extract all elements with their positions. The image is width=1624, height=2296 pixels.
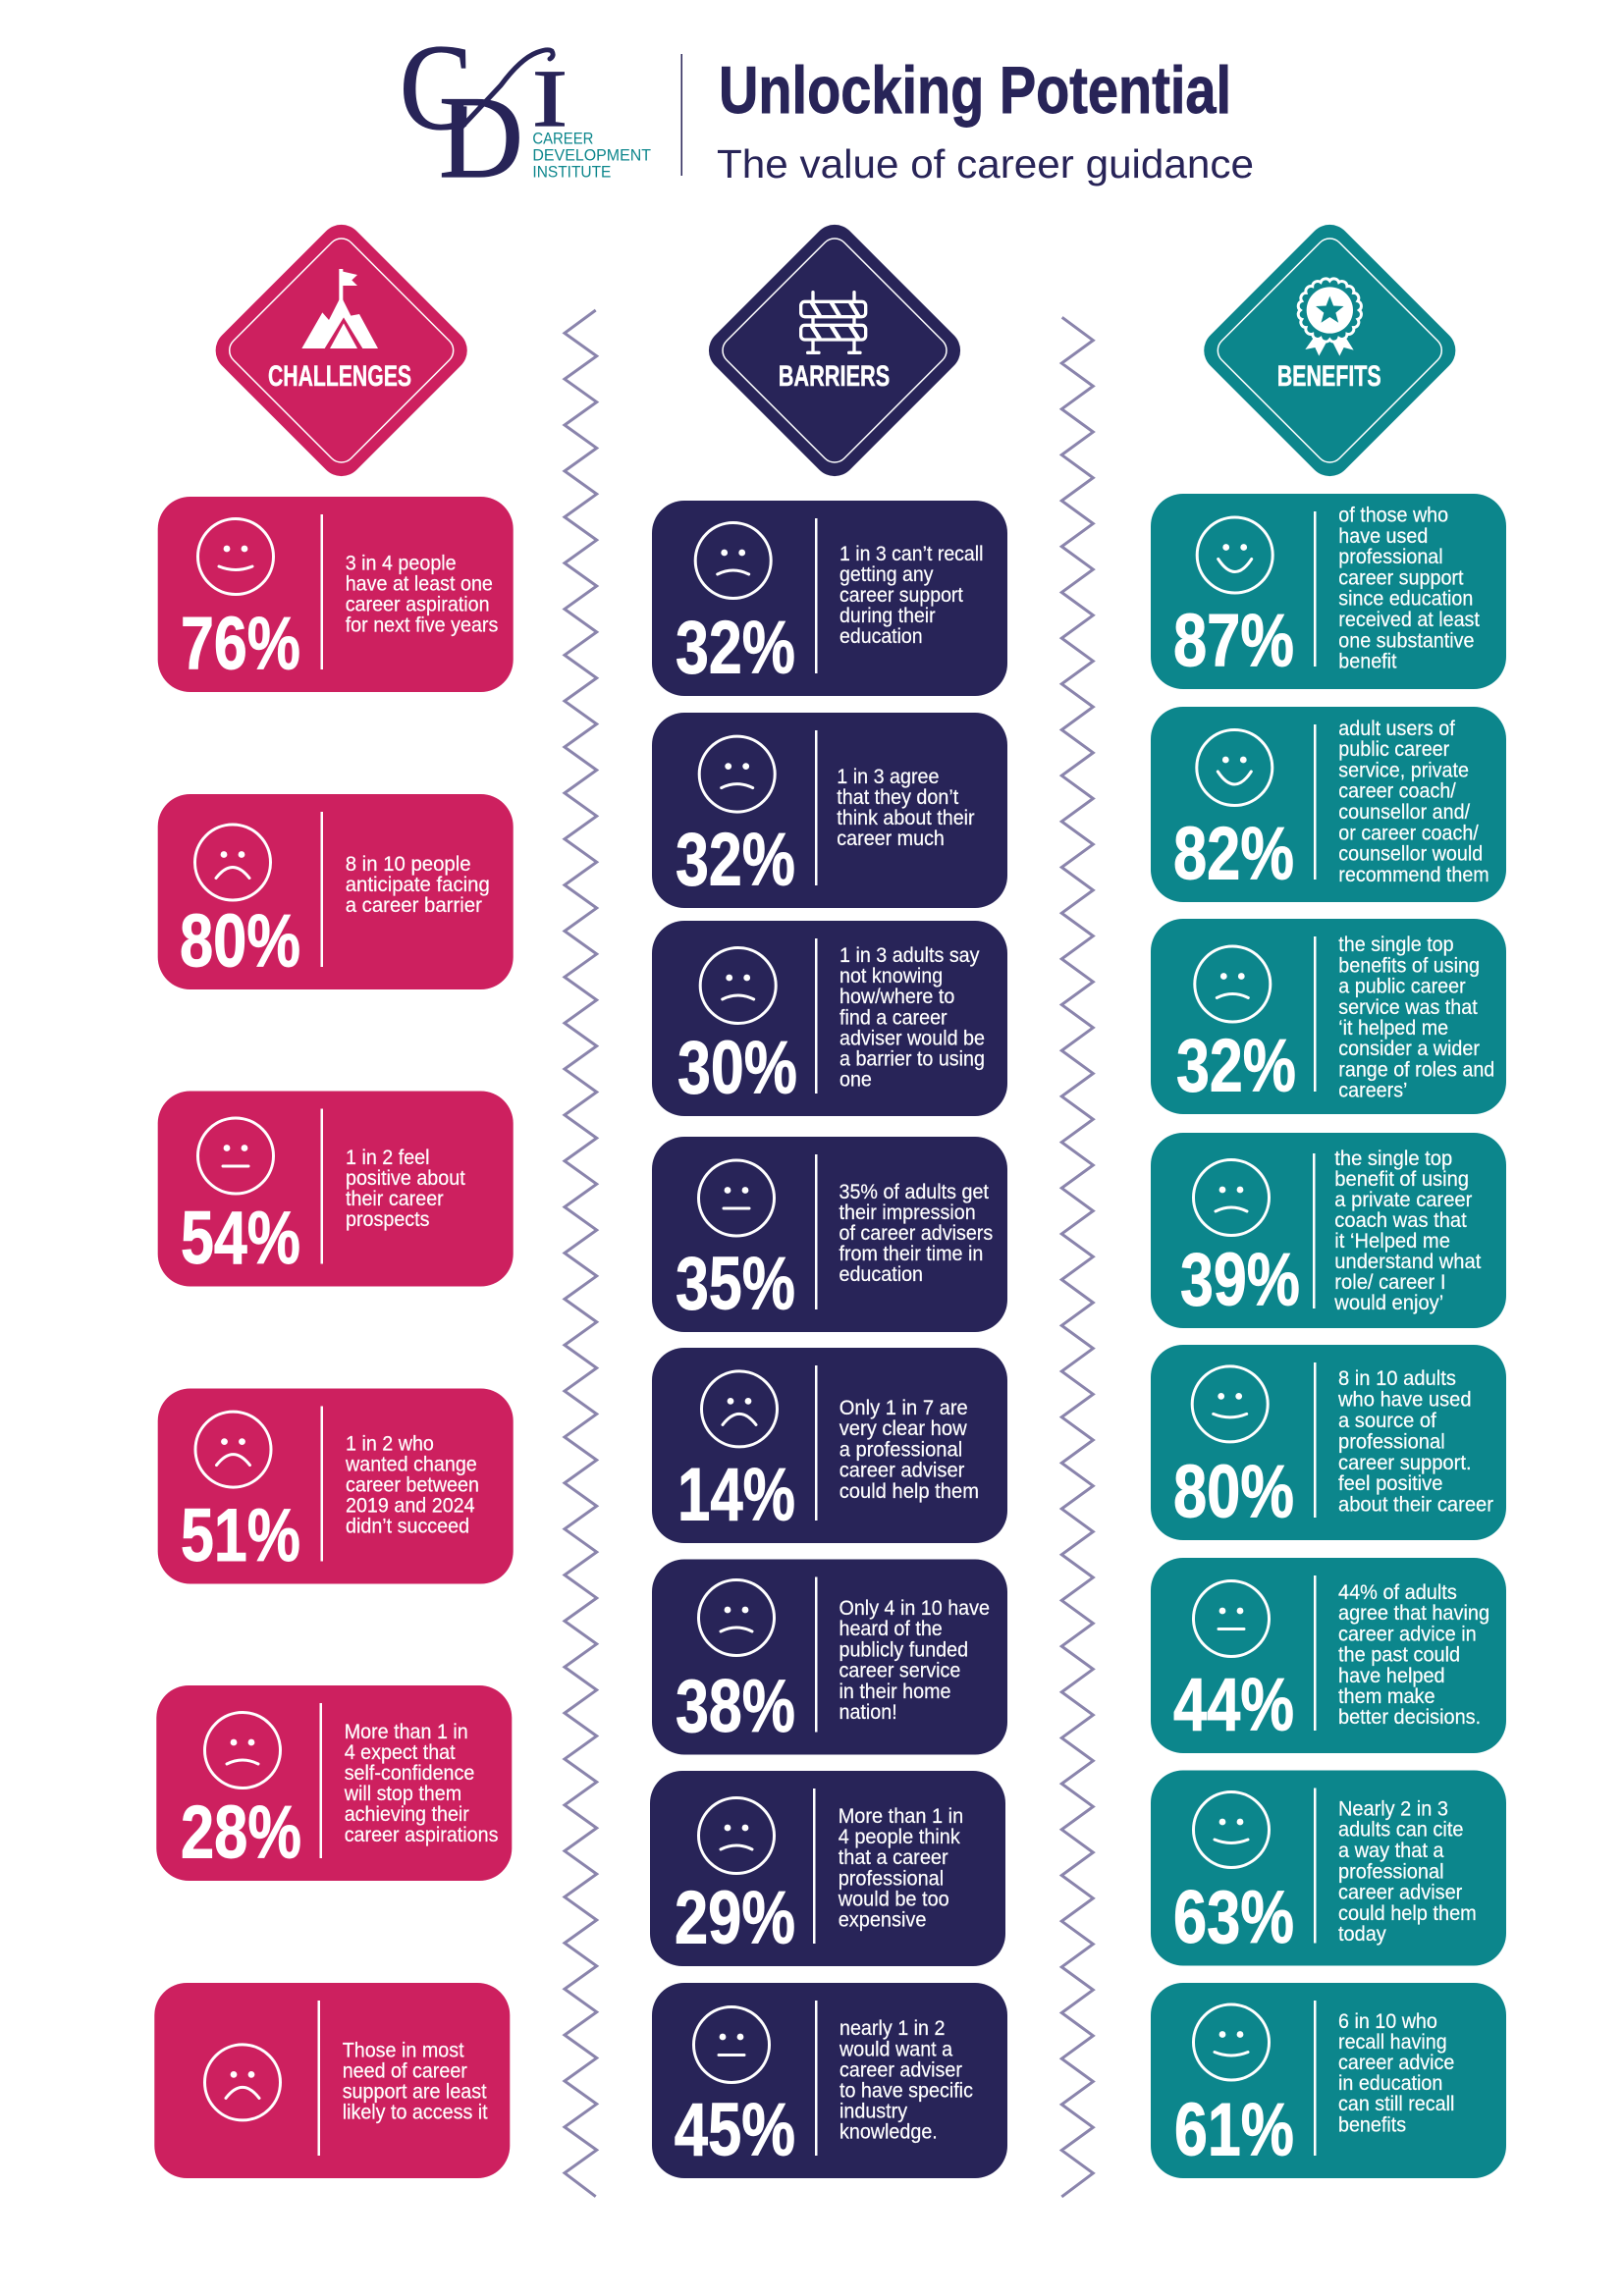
statistic: 39% (1180, 1239, 1300, 1321)
logo: CDI Career Development Institute: C (400, 21, 472, 156)
text block: wanted change (345, 1454, 477, 1476)
text block: a public career (1338, 976, 1466, 998)
icon: slight frown face (1195, 946, 1271, 1022)
text block: understand what (1334, 1251, 1482, 1273)
text block: would be too (838, 1888, 949, 1911)
icon: slight frown face (699, 736, 775, 812)
statistic: 61% (1174, 2089, 1294, 2171)
text block: nation! (839, 1701, 897, 1724)
subtitle: The value of career guidance (717, 141, 1254, 187)
text block: their impression (839, 1201, 976, 1224)
panel: benefit 39% (1151, 1133, 1506, 1328)
text block: career support. (1338, 1451, 1472, 1474)
text block: career adviser (839, 2059, 962, 2082)
text block: adult users of (1338, 718, 1455, 740)
panel: challenge, least likely to access (154, 1983, 510, 2178)
statistic: 63% (1173, 1876, 1294, 1959)
text block: a private career (1334, 1189, 1472, 1211)
text block: expensive (839, 1908, 926, 1932)
logo: CDI Career Development Institute: CAREER (532, 130, 593, 148)
text block: 1 in 3 adults say (839, 944, 980, 967)
text block: career advice (1338, 2052, 1454, 2074)
icon: frown face (701, 1371, 778, 1447)
icon: slight frown face (699, 1580, 774, 1655)
text block: one substantive (1338, 630, 1474, 652)
statistic: 29% (675, 1877, 795, 1959)
text block: benefit of using (1334, 1168, 1469, 1191)
panel: barrier 14% (652, 1348, 1007, 1543)
panel: challenge 76% (158, 497, 514, 692)
panel: barrier 30% (652, 921, 1007, 1116)
text block: didn’t succeed (346, 1516, 469, 1538)
text block: career much (837, 828, 945, 850)
icon: neutral face (1194, 1580, 1269, 1657)
text block: self-confidence (345, 1762, 474, 1785)
text block: professional (1338, 1860, 1444, 1883)
panel: benefit 80% (1151, 1345, 1506, 1540)
panel: barrier 32% recall (652, 501, 1007, 696)
text block: them make (1338, 1685, 1435, 1708)
icon: frown face (195, 1412, 271, 1487)
text block: one (839, 1069, 872, 1092)
icon: mountain with flag (301, 269, 378, 348)
statistic: 54% (181, 1197, 300, 1280)
panel: barrier 32% think (652, 713, 1007, 908)
text block: Nearly 2 in 3 (1338, 1797, 1448, 1821)
text block: very clear how (839, 1417, 967, 1440)
text block: role/ career I (1334, 1271, 1445, 1294)
text block: 6 in 10 who (1338, 2010, 1437, 2033)
statistic: 51% (181, 1494, 300, 1577)
text block: better decisions. (1338, 1706, 1481, 1729)
icon: frown face (194, 825, 271, 900)
text block: not knowing (839, 966, 943, 988)
text block: from their time in (839, 1243, 983, 1265)
icon: neutral face (699, 1160, 774, 1236)
panel: barrier 38% (652, 1559, 1007, 1755)
text block: counsellor would (1338, 843, 1483, 866)
icon: big smile face (1197, 517, 1272, 593)
icon: slight smile face (1192, 1366, 1268, 1442)
text block: 8 in 10 people (346, 853, 471, 876)
text block: 44% of adults (1338, 1581, 1457, 1604)
text block: career support (839, 584, 963, 607)
text block: recommend them (1338, 864, 1489, 886)
statistic: 35% (676, 1243, 795, 1325)
text block: More than 1 in (839, 1805, 963, 1828)
statistic: 30% (677, 1027, 797, 1109)
panel: benefit 44% (1151, 1558, 1506, 1753)
text block: 35% of adults get (839, 1181, 989, 1203)
statistic: 44% (1173, 1663, 1294, 1747)
text block: counsellor and/ (1338, 801, 1470, 824)
text block: about their career (1338, 1493, 1493, 1517)
logo: CDI Career Development Institute (400, 21, 651, 202)
text block: 1 in 2 who (346, 1433, 434, 1456)
icon: big smile face (1197, 730, 1272, 805)
text block: career aspirations (345, 1824, 498, 1846)
text block: feel positive (1338, 1472, 1442, 1495)
logo: CDI Career Development Institute: I (532, 53, 568, 143)
text block: public career (1338, 739, 1449, 761)
panel: challenge 51% (158, 1388, 514, 1584)
icon: slight frown face (699, 1798, 774, 1873)
text block: received at least (1338, 609, 1480, 631)
statistic: 32% (676, 607, 795, 689)
text block: heard of the (839, 1619, 943, 1640)
text block: career between (346, 1474, 479, 1497)
text block: could help them (839, 1479, 979, 1503)
logo: CDI Career Development Institute: D (439, 72, 523, 202)
statistic: 32% (676, 819, 795, 901)
text block: career aspiration (346, 594, 490, 616)
text block: 1 in 3 agree (837, 766, 939, 788)
text block: need of career (343, 2060, 467, 2083)
statistic: 80% (180, 899, 300, 984)
text block: 3 in 4 people (346, 553, 457, 575)
icon: frown face (204, 2045, 281, 2120)
text block: a source of (1338, 1410, 1436, 1432)
text block: adviser would be (839, 1028, 985, 1050)
text block: education (839, 1263, 923, 1286)
text block: benefits (1338, 2114, 1406, 2136)
icon: slight frown face (695, 522, 771, 599)
text block: education (839, 625, 923, 648)
text block: benefit (1338, 651, 1397, 673)
text block: 8 in 10 adults (1338, 1367, 1456, 1390)
statistic: 14% (677, 1453, 795, 1537)
text block: career adviser (1338, 1881, 1463, 1904)
panel: challenge 54% (158, 1092, 514, 1286)
heading: benefits: BENEFITS (1277, 360, 1381, 393)
text block: of those who (1338, 505, 1448, 527)
text block: of career advisers (839, 1222, 993, 1245)
title: Unlocking Potential (719, 53, 1231, 128)
icon: slight smile face (198, 518, 273, 595)
text block: have used (1338, 525, 1428, 548)
text block: career coach/ (1338, 780, 1456, 803)
statistic: 87% (1173, 599, 1294, 683)
text block: service, private (1338, 760, 1469, 782)
logo: CDI Career Development Institute: INSTITUTE (532, 163, 611, 182)
panel: benefit 82% (1151, 707, 1506, 902)
text block: benefits of using (1338, 955, 1480, 978)
text block: during their (839, 605, 936, 627)
text block: More than 1 in (345, 1721, 468, 1743)
text block: can still recall (1338, 2094, 1454, 2115)
text block: since education (1338, 588, 1473, 611)
text block: Only 1 in 7 are (839, 1397, 968, 1419)
icon: slight smile face (1194, 1792, 1269, 1867)
text block: have at least one (346, 573, 493, 596)
text block: prospects (346, 1208, 430, 1231)
text block: career advice in (1338, 1623, 1477, 1646)
text block: recall having (1338, 2031, 1447, 2054)
text block: that a career (839, 1846, 948, 1869)
text block: will stop them (344, 1783, 461, 1805)
header diamond: barriers (700, 216, 969, 485)
text block: it ‘Helped me (1334, 1230, 1450, 1253)
panel: barrier 35% (652, 1137, 1007, 1332)
icon: award rosette (1298, 279, 1361, 356)
statistic: 32% (1176, 1025, 1296, 1107)
text block: how/where to (839, 987, 954, 1008)
header diamond: challenges (207, 216, 476, 485)
text block: career service (839, 1660, 960, 1682)
text block: could help them (1338, 1901, 1477, 1925)
panel: benefit 32% (1151, 919, 1506, 1114)
statistic: 45% (675, 2089, 795, 2171)
text block: their career (346, 1188, 444, 1210)
statistic: 38% (676, 1665, 795, 1748)
text block: achieving their (345, 1803, 469, 1826)
heading: barriers: BARRIERS (779, 360, 890, 393)
text block: anticipate facing (346, 874, 490, 896)
panel: benefit 61% (1151, 1983, 1506, 2178)
text block: the past could (1338, 1643, 1460, 1667)
text block: who have used (1337, 1388, 1472, 1412)
text block: professional (1338, 547, 1443, 568)
heading: challenges: CHALLENGES (268, 360, 411, 393)
statistic: 80% (1173, 1451, 1294, 1533)
text block: industry (839, 2101, 908, 2123)
text block: career support (1338, 567, 1464, 590)
text block: in education (1338, 2073, 1442, 2095)
text block: professional (1338, 1430, 1445, 1454)
text block: 1 in 2 feel (346, 1147, 430, 1169)
text block: service was that (1338, 996, 1478, 1019)
text block: 4 people think (839, 1826, 961, 1848)
icon: slight frown face (1194, 1160, 1269, 1235)
icon: road barrier (801, 293, 866, 352)
text block: that they don’t (837, 786, 959, 809)
text block: getting any (839, 563, 934, 586)
text block: adults can cite (1338, 1818, 1463, 1842)
text block: a professional (839, 1438, 962, 1462)
text block: the single top (1334, 1148, 1452, 1170)
panel: challenge 28% (156, 1685, 512, 1881)
icon: slight frown face (204, 1712, 281, 1789)
statistic: 28% (181, 1790, 301, 1875)
text block: would want a (839, 2039, 953, 2060)
zigzag divider: right (1061, 317, 1093, 2197)
text block: to have specific (839, 2080, 973, 2103)
text block: a barrier to using (839, 1048, 985, 1071)
text block: careers’ (1338, 1080, 1407, 1102)
text block: agree that having (1338, 1602, 1489, 1625)
panel: barrier 29% (650, 1771, 1005, 1966)
panel: benefit 63% (1151, 1771, 1506, 1965)
text block: a way that a (1338, 1840, 1444, 1862)
icon: slight smile face (1194, 2004, 1269, 2080)
statistic: 82% (1173, 813, 1294, 895)
text block: 1 in 3 can’t recall (839, 543, 983, 565)
text block: likely to access it (343, 2102, 488, 2124)
text block: have helped (1338, 1664, 1445, 1687)
text block: would enjoy’ (1333, 1292, 1443, 1314)
text block: 4 expect that (345, 1741, 456, 1764)
text block: range of roles and (1338, 1059, 1494, 1082)
panel: barrier 45% (652, 1983, 1007, 2178)
header diamond: benefits (1195, 216, 1464, 485)
text block: find a career (839, 1007, 947, 1029)
text block: consider a wider (1338, 1039, 1480, 1060)
icon: neutral face (198, 1118, 273, 1194)
text block: Those in most (343, 2040, 464, 2062)
text block: think about their (837, 807, 975, 829)
text block: the single top (1338, 934, 1454, 956)
text block: today (1338, 1923, 1387, 1946)
text block: professional (839, 1867, 944, 1890)
text block: coach was that (1334, 1209, 1467, 1232)
panel: challenge 80% (158, 794, 514, 989)
text block: positive about (346, 1167, 465, 1190)
text block: Only 4 in 10 have (839, 1597, 990, 1620)
text block: publicly funded (839, 1639, 968, 1662)
zigzag divider: left (565, 310, 597, 2197)
logo: CDI Career Development Institute: DEVELOPMENT (532, 145, 651, 164)
icon: slight frown face (700, 948, 776, 1023)
text block: in their home (839, 1681, 951, 1703)
text block: ‘it helped me (1338, 1017, 1448, 1040)
text block: support are least (343, 2081, 487, 2104)
icon: neutral face (693, 2006, 770, 2083)
panel: benefit 87% (1151, 494, 1506, 689)
text block: or career coach/ (1338, 823, 1479, 844)
statistic: 76% (181, 603, 300, 685)
text block: career adviser (839, 1459, 965, 1482)
text block: knowledge. (839, 2121, 938, 2144)
text block: 2019 and 2024 (346, 1495, 475, 1518)
text block: a career barrier (346, 894, 482, 917)
text block: nearly 1 in 2 (839, 2018, 945, 2040)
text block: for next five years (346, 614, 498, 637)
